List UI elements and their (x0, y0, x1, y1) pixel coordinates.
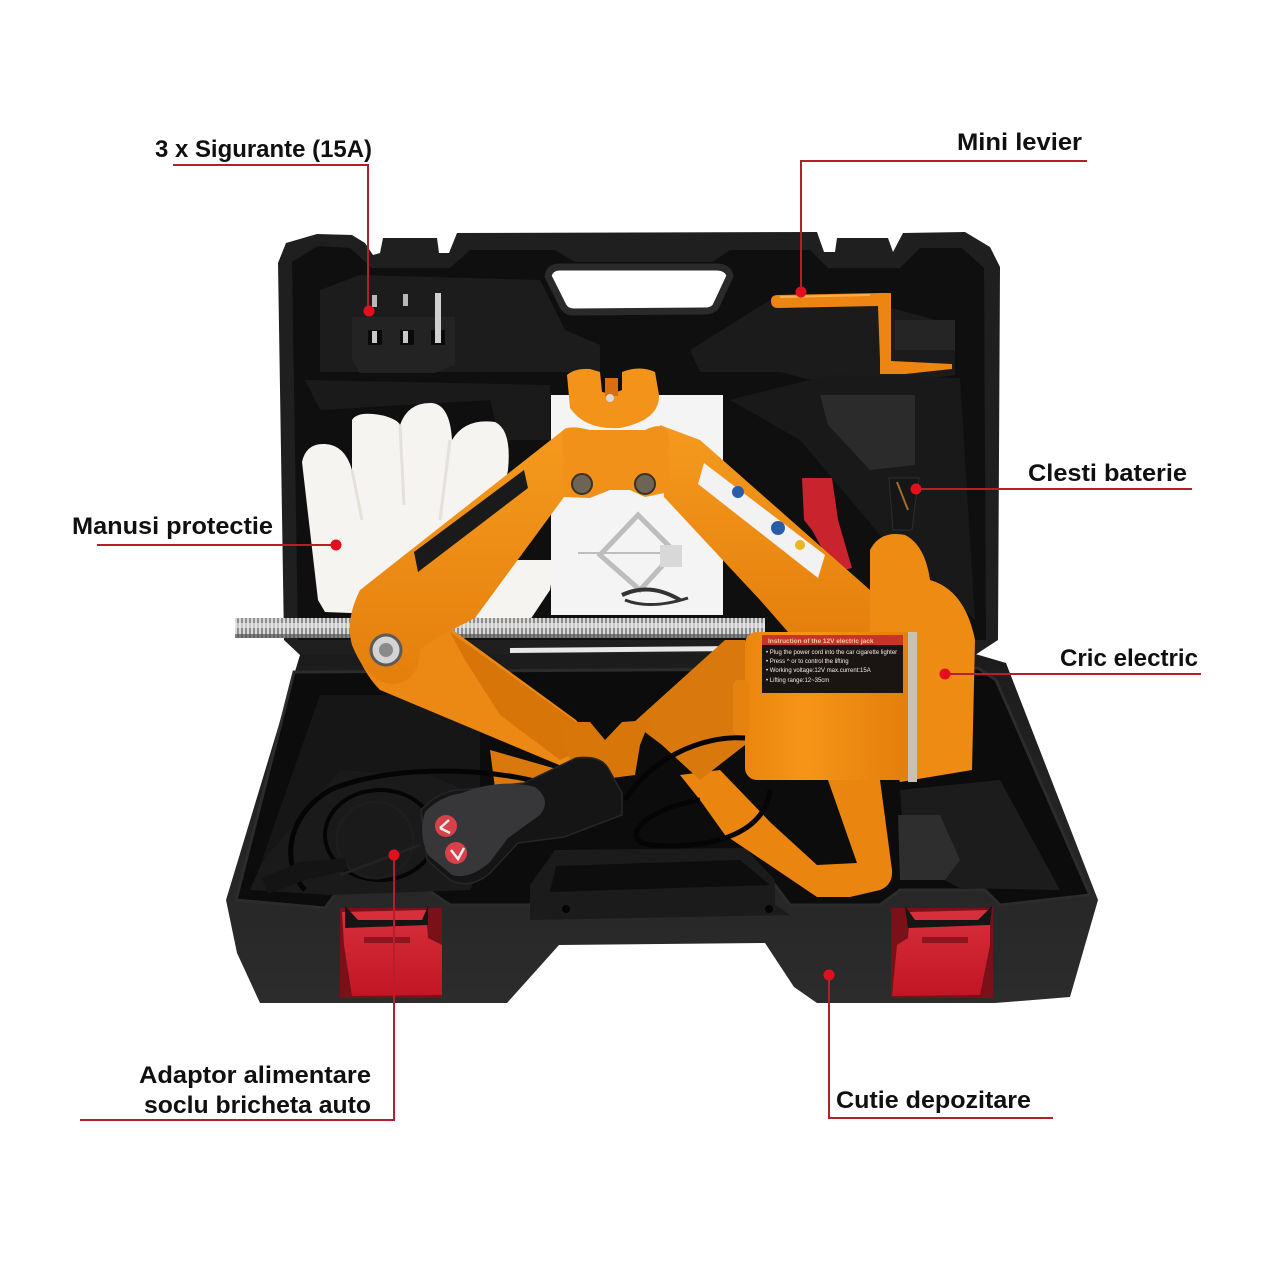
jack sketch on manual (578, 515, 688, 605)
callout: fuses (155, 136, 374, 316)
silver ring (908, 632, 917, 782)
upper left arm (350, 428, 566, 684)
base inner floor (262, 695, 480, 860)
lower right arm (633, 640, 750, 780)
carry handle recess (530, 848, 790, 920)
down button (445, 842, 467, 864)
left latch (340, 906, 442, 998)
cables (291, 738, 770, 890)
handle opening (548, 267, 730, 312)
lid moulding left (320, 275, 600, 372)
remote control (421, 757, 622, 884)
callout: storage case (824, 970, 1053, 1118)
motor label (762, 635, 903, 693)
motor cylinder (745, 632, 915, 780)
lid moulding lower left (305, 380, 550, 440)
metal strip (510, 646, 738, 653)
remote panel (422, 784, 545, 876)
pivot bolt (371, 635, 401, 665)
manual booklet (551, 395, 723, 615)
black sticker (414, 470, 528, 572)
callout: power adapter (80, 850, 400, 1120)
lower left arm (352, 610, 600, 767)
callout: battery clamps (910, 460, 1192, 494)
battery clamps (802, 478, 919, 572)
warning sticker (698, 463, 825, 578)
case lid (upper half) (278, 232, 1000, 655)
orange base behind remote (490, 750, 560, 792)
top bracket (562, 426, 669, 498)
gear teeth (560, 720, 650, 778)
motor label: • Lifting range:12~35cm (766, 678, 829, 684)
power connector (262, 858, 348, 894)
callout: gloves (72, 513, 342, 550)
callout: electric jack: Cric electric (1060, 645, 1198, 672)
callout: power adapter: soclu bricheta auto (144, 1092, 371, 1119)
glove (302, 403, 555, 620)
upper right arm (660, 425, 880, 640)
motor label: • Working voltage:12V max.current:15A (766, 668, 871, 674)
callout: power adapter: Adaptor alimentare (139, 1062, 371, 1089)
threaded screw (235, 618, 765, 638)
lid moulding right (730, 375, 975, 620)
base rim (236, 668, 1090, 908)
callout: battery clamps: Clesti baterie (1028, 460, 1187, 487)
red clamp (802, 478, 852, 572)
mini lever (771, 293, 952, 374)
motor (733, 534, 975, 782)
callout: storage case: Cutie depozitare (836, 1087, 1031, 1114)
callout: mini lever: Mini levier (957, 129, 1082, 156)
black clamp (889, 478, 919, 530)
motor label: • Plug the power cord into the car cigarette lighter (766, 650, 897, 656)
motor label: Instruction of the 12V electric jack (768, 638, 874, 645)
callout: mini lever (796, 129, 1087, 298)
base right compartment (900, 780, 1060, 890)
callout: gloves: Manusi protectie (72, 513, 273, 540)
top saddle (567, 368, 659, 428)
gearbox housing (870, 534, 975, 782)
bracket bolts (572, 474, 592, 494)
scissor jack (350, 368, 880, 792)
up button (435, 815, 457, 837)
lid moulding centre (690, 300, 955, 390)
right latch (891, 906, 993, 998)
callout: fuses: 3 x Sigurante (15A) (155, 136, 372, 163)
jack carrying handle (680, 770, 892, 897)
motor label: • Press ^ or to control the lifting (766, 659, 849, 665)
fuses (352, 293, 455, 373)
case base (lower half) (226, 653, 1098, 1003)
callout: electric jack (940, 645, 1201, 680)
